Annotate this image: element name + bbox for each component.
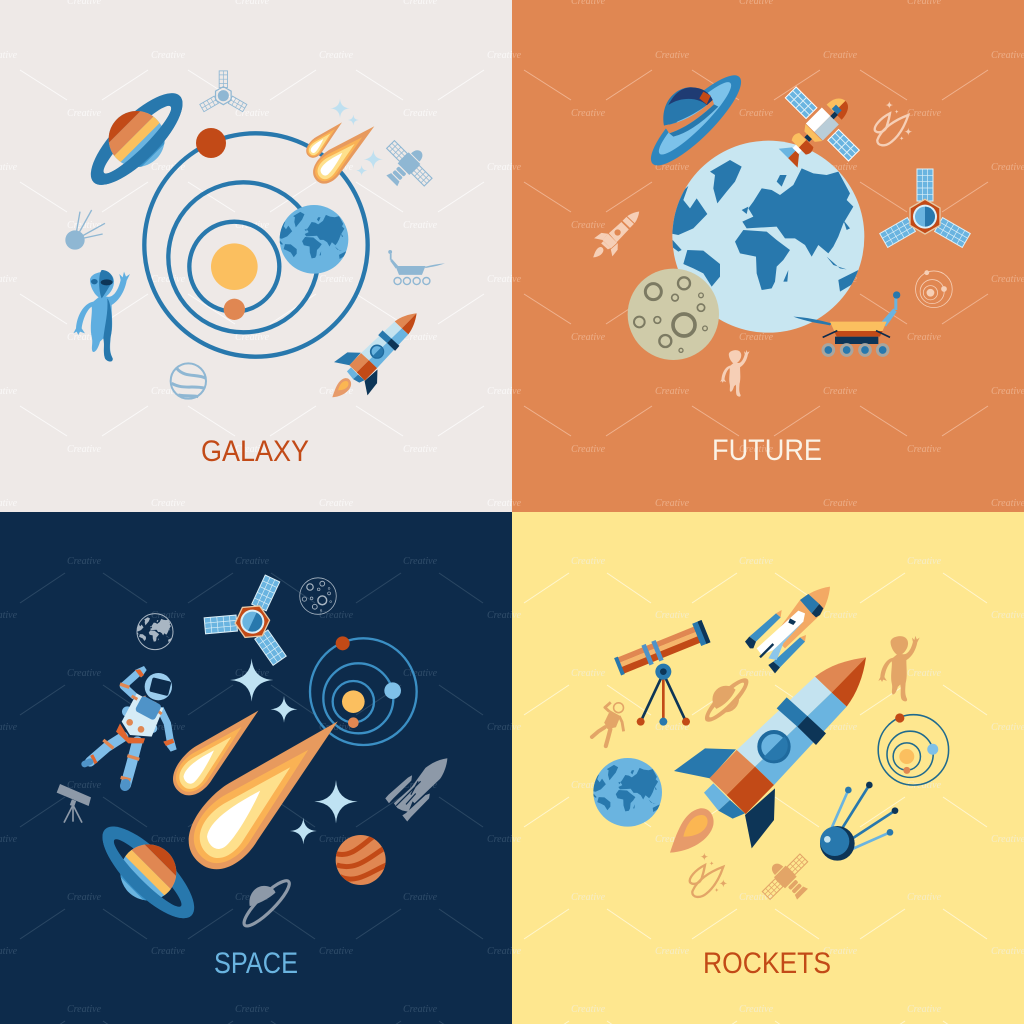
icon: solar system outline [916, 270, 952, 308]
ringed planet [72, 75, 201, 203]
banded planet [335, 835, 387, 885]
icon: astronaut [592, 702, 624, 746]
rover [793, 291, 900, 355]
icon: moon outline [300, 578, 336, 614]
icon: comets outline [690, 853, 727, 897]
icon: shuttle [385, 758, 447, 821]
icon: satellite [755, 846, 821, 913]
comet small [302, 117, 347, 161]
comet large [172, 697, 360, 882]
solar system orbits [144, 133, 368, 357]
title: galaxy: GALAXY [201, 435, 309, 468]
icon: alien [878, 636, 920, 701]
icon: rocket [332, 313, 417, 397]
icon: rover [388, 250, 445, 285]
title: future: FUTURE [712, 434, 822, 467]
icon: telescope [57, 784, 91, 823]
solar system [878, 713, 949, 785]
icon: rocket outline [593, 212, 639, 257]
icon: banded planet [171, 363, 206, 399]
moon [628, 269, 719, 360]
small orange planet [224, 299, 245, 320]
icon: comets outline [875, 101, 912, 145]
three panel satellite [198, 559, 314, 669]
earth globe [670, 141, 864, 333]
panel: space [0, 512, 512, 1024]
astronaut [85, 666, 177, 786]
title: space: SPACE [214, 947, 298, 980]
comet large [307, 116, 383, 189]
satellite [757, 69, 877, 190]
title: rockets: ROCKETS [703, 947, 831, 980]
icon: small ringed planet [696, 669, 756, 729]
ufo [640, 65, 752, 176]
telescope [613, 620, 710, 726]
panel: galaxy [0, 0, 512, 512]
solar system [310, 636, 417, 745]
red planet [196, 128, 226, 158]
three panel satellite [880, 169, 970, 247]
main rocket [670, 657, 866, 853]
icon: satellite [373, 133, 440, 200]
ringed planet [84, 808, 213, 937]
comet small [164, 697, 271, 803]
icon: alien [73, 270, 130, 361]
earth [279, 205, 348, 274]
stars [330, 99, 383, 176]
sun [211, 243, 258, 290]
panel: future [512, 0, 1024, 512]
panel: rockets [512, 512, 1024, 1024]
icon: globe outline [137, 614, 173, 650]
icon: alien [720, 350, 750, 397]
shuttle [745, 587, 830, 673]
sputnik [820, 782, 898, 861]
icon: ufo [239, 876, 294, 931]
icon: sputnik [66, 210, 105, 249]
stars [230, 658, 358, 844]
earth [593, 758, 662, 827]
icon: three panel satellite [200, 71, 247, 112]
